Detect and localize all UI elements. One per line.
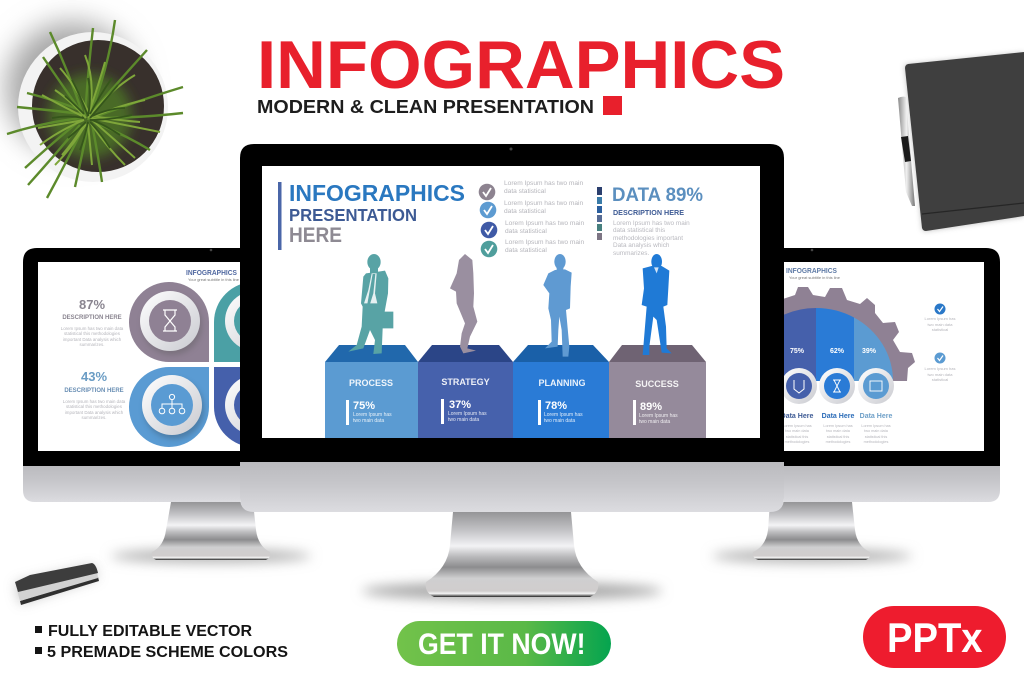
podium columns: Lorem Ipsum has: [544, 412, 583, 418]
left screen content: [61, 270, 240, 447]
right screen content: methodologies: [785, 440, 809, 444]
podium columns: [325, 345, 706, 438]
monitor: center: [240, 144, 784, 600]
left screen content: Your great subtitle in this line: [188, 277, 240, 282]
left screen content: DESCRIPTION HERE: [64, 388, 124, 394]
right screen content: statistical this: [786, 435, 808, 439]
badge: PPTx: PPTx: [887, 614, 983, 661]
heading block on screen: INFOGRAPHICS: [289, 180, 465, 206]
podium columns: PROCESS: [349, 378, 393, 388]
podium columns: PLANNING: [538, 378, 586, 388]
podium columns: STRATEGY: [441, 377, 490, 387]
podium columns: 37%: [449, 399, 471, 411]
data callout: [597, 185, 703, 257]
silhouettes: [348, 254, 672, 357]
podium columns: two main data: [544, 418, 575, 424]
checklist: data statistical: [505, 247, 547, 254]
data callout: Lorem Ipsum has two main: [613, 220, 690, 227]
heading block on screen: [278, 180, 465, 250]
left screen content: statistical this methodologies: [66, 404, 123, 409]
right screen content: Lorem Ipsum has: [861, 424, 891, 428]
checklist: Lorem Ipsum has two main: [504, 200, 583, 207]
right screen content: methodologies: [826, 440, 850, 444]
red square accent: [603, 96, 622, 115]
right screen content: Lorem Ipsum has: [925, 316, 955, 321]
podium columns: SUCCESS: [635, 379, 679, 389]
right screen content: two main data: [826, 429, 851, 433]
icon: potted plant: [6, 20, 183, 198]
title: INFOGRAPHICS: [257, 26, 785, 103]
right screen content: Lorem Ipsum has: [925, 366, 955, 371]
button: get it now: [397, 621, 611, 666]
right screen content: 62%: [830, 348, 845, 355]
gear: [780, 287, 915, 381]
right screen content: two main data: [785, 429, 810, 433]
left screen content: DESCRIPTION HERE: [62, 315, 122, 321]
icon: tablet with pen: [898, 52, 1024, 231]
right screen content: two main data: [864, 429, 889, 433]
right screen content: statistical this: [865, 435, 887, 439]
button: get it now: GET IT NOW!: [418, 628, 585, 661]
right screen content: methodologies: [864, 440, 888, 444]
data callout: methodologies important: [613, 235, 683, 242]
right screen content: 39%: [862, 348, 877, 355]
podium columns: 78%: [545, 400, 567, 412]
left screen content: Lorem Ipsum has two main data: [63, 399, 126, 404]
right screen content: statistical: [932, 377, 948, 382]
right screen content: Lorem Ipsum has: [823, 424, 853, 428]
data callout: data statistical this: [613, 227, 665, 234]
feature list: [35, 623, 288, 661]
left screen content: 87%: [79, 297, 105, 312]
right screen content: [780, 266, 955, 444]
podium columns: 75%: [353, 400, 375, 412]
podium columns: Lorem Ipsum has: [448, 411, 487, 417]
left screen content: INFOGRAPHICS: [186, 270, 237, 277]
left screen content: Lorem Ipsum has two main data: [61, 326, 124, 331]
podium columns: Lorem Ipsum has: [639, 413, 678, 419]
right screen content: Lorem Ipsum has: [782, 424, 812, 428]
left screen content: important Data analysis which: [63, 337, 122, 342]
checklist: Lorem Ipsum has two main: [505, 220, 584, 227]
podium columns: two main data: [639, 419, 670, 425]
checklist: [479, 180, 584, 257]
right screen content: two main data: [928, 322, 953, 327]
podium columns: two main data: [353, 418, 384, 424]
monitor: right: [712, 248, 1000, 563]
subtitle: MODERN & CLEAN PRESENTATION: [257, 96, 594, 117]
heading block on screen: PRESENTATION: [289, 205, 417, 225]
monitor: left: [23, 248, 311, 563]
feature list: 5 PREMADE SCHEME COLORS: [47, 644, 288, 661]
podium columns: Lorem Ipsum has: [353, 412, 392, 418]
left screen content: important Data analysis which: [65, 410, 124, 415]
data callout: DATA 89%: [612, 185, 703, 206]
left screen content: 43%: [81, 369, 107, 384]
feature list: FULLY EDITABLE VECTOR: [48, 623, 252, 640]
right screen content: Data Here: [822, 413, 854, 420]
badge: PPTx: [863, 606, 1006, 668]
left screen content: summarizes.: [82, 415, 106, 420]
right screen content: Your great subtitle in this line: [789, 275, 841, 280]
checklist: data statistical: [505, 228, 547, 235]
right screen content: statistical: [932, 327, 948, 332]
right screen content: INFOGRAPHICS: [786, 266, 837, 275]
left screen content: summarizes.: [80, 342, 104, 347]
podium columns: 89%: [640, 401, 662, 413]
heading block on screen: HERE: [289, 224, 342, 247]
right screen content: 75%: [790, 348, 805, 355]
checklist: Lorem Ipsum has two main: [504, 180, 583, 187]
checklist: Lorem Ipsum has two main: [505, 239, 584, 246]
right screen content: statistical this: [827, 435, 849, 439]
left screen content: statistical this methodologies: [64, 331, 121, 336]
right screen content: two main data: [928, 372, 953, 377]
podium columns: two main data: [448, 417, 479, 423]
data callout: summarizes.: [613, 250, 649, 257]
checklist: data statistical: [504, 208, 546, 215]
icon: stapler: [15, 563, 99, 605]
right screen content: Data Here: [781, 413, 813, 420]
right screen content: Data Here: [860, 413, 892, 420]
data callout: DESCRIPTION HERE: [613, 208, 684, 217]
data callout: Data analysis which: [613, 242, 670, 249]
checklist: data statistical: [504, 188, 546, 195]
